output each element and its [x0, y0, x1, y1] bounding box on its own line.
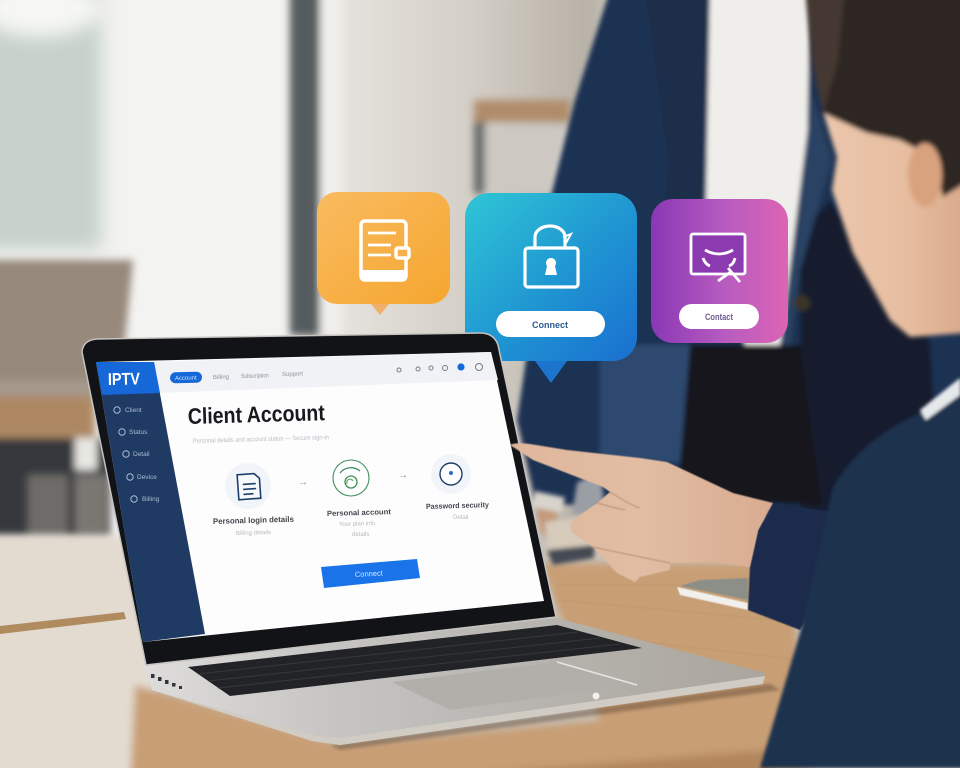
lighter panel below card: [600, 345, 690, 470]
phone on desk: [677, 578, 748, 610]
standing person: [517, 0, 960, 520]
top navigation: [170, 363, 482, 383]
keyboard: [188, 625, 642, 696]
collar: [920, 378, 960, 420]
icon: document: [237, 473, 261, 500]
ear: [908, 143, 942, 207]
icon: swirl: [340, 468, 360, 488]
step 2: Personal account: [327, 507, 392, 518]
blazer: [517, 0, 960, 520]
dark right jacket panel: [800, 200, 935, 520]
laptop base: [143, 618, 765, 745]
button: [321, 559, 420, 588]
trackpad: [392, 662, 637, 710]
background items: paper, phone, hand: [531, 470, 604, 565]
inner lapel: [645, 0, 708, 345]
trousers: [677, 345, 822, 505]
floating card: contact: Contact: [705, 312, 733, 322]
screen: [96, 352, 544, 642]
top navigation: Account: [175, 375, 197, 382]
step 3: Detail: [453, 515, 468, 521]
floating card: lock: Connect: [532, 320, 568, 330]
subheading: Personal details and account status — Secure sign-in: [193, 434, 329, 445]
icon: document tablet: [361, 221, 409, 280]
foreground wooden desk: [0, 535, 810, 768]
icon: chat screen: [691, 234, 745, 282]
floating card: document: [317, 192, 450, 315]
hair highlight: [805, 0, 845, 113]
logo block: [96, 362, 160, 395]
sidebar items: [114, 407, 160, 503]
face: [823, 100, 960, 337]
sidebar items: Billing: [142, 496, 160, 503]
jacket button: [794, 295, 810, 311]
step 2: [327, 460, 392, 538]
pill button: [679, 304, 759, 329]
top navigation: Support: [282, 371, 303, 378]
icon: circle badge: [440, 463, 462, 485]
port dots: [151, 674, 182, 689]
sidebar items: Detail: [133, 451, 150, 458]
hand pointing: [510, 443, 773, 582]
sidebar: [96, 362, 205, 642]
top navigation: Subscription: [241, 373, 269, 380]
shirt: [706, 0, 810, 345]
seated person in the foreground: [510, 0, 960, 768]
hair: [805, 0, 960, 197]
background laptop and table: [0, 260, 133, 538]
laptop: [82, 333, 765, 745]
button: Connect: [355, 568, 384, 579]
floating card: contact: [651, 199, 788, 343]
icon: padlock: [525, 226, 578, 287]
step 2: details: [352, 532, 369, 538]
step 1: [213, 463, 295, 537]
sidebar items: Status: [129, 429, 148, 436]
sidebar items: Device: [137, 474, 157, 481]
floating card: lock: [465, 193, 637, 383]
sleeve cuff: [748, 503, 840, 630]
header bar: [154, 352, 498, 393]
step 1: Personal login details: [213, 515, 295, 526]
sidebar items: Client: [125, 407, 142, 414]
arrow: →: [298, 477, 308, 488]
top navigation: Billing: [213, 375, 229, 381]
laptop lid: [82, 333, 556, 665]
torso: [760, 375, 960, 768]
pill button: [496, 311, 605, 337]
step 1: Billing details: [236, 530, 271, 537]
step 3: Password security: [426, 500, 490, 511]
heading: Client Account: [187, 400, 326, 429]
arrow: →: [398, 470, 408, 481]
logo text: IPTV: [108, 369, 141, 389]
step 3: [426, 454, 490, 521]
step 2: Your plan info: [339, 521, 376, 528]
